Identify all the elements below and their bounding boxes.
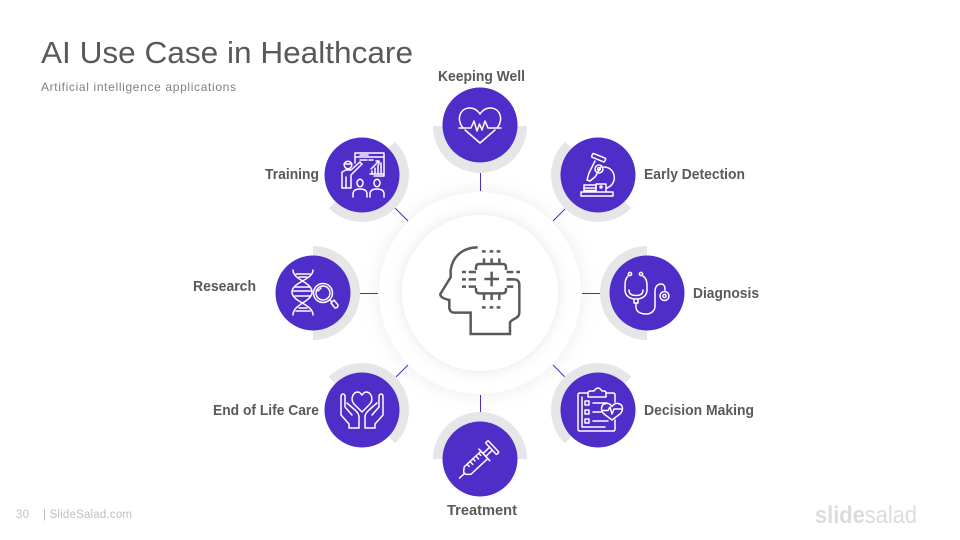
gray half ring [313,246,360,340]
footer: page number: 30 [16,509,29,521]
gray half ring [532,142,631,241]
label: End of Life Care [213,402,319,419]
label: Decision Making [644,402,754,419]
label: Early Detection [644,166,745,183]
connector lines [360,173,600,413]
gray half ring [329,344,428,443]
label: Diagnosis [693,285,759,302]
icon: presenter with chart [342,153,384,197]
purple circle [324,372,400,448]
icon: stethoscope [625,272,669,314]
gray half ring [329,142,428,241]
logo wordmark: slidesalad [815,502,917,529]
node: Decision Making [532,344,754,448]
node: End of Life Care [213,344,428,448]
purple circle [324,138,400,212]
gray half ring [433,412,527,459]
subtitle: Artificial intelligence applications [41,80,236,94]
outer ring [379,192,581,394]
node: Training [265,138,428,241]
icon: heart with pulse [459,108,501,143]
icon: hands holding heart [341,392,383,428]
node: Keeping Well [433,68,527,173]
label: Training [265,166,319,183]
label: Keeping Well [438,68,525,85]
purple circle [276,256,350,330]
node: Diagnosis [600,246,759,340]
purple circle [560,372,636,448]
gray half ring [600,246,647,340]
inner disc [402,215,558,371]
purple circle [560,138,636,212]
icon: clipboard with heart [578,388,622,431]
icon: syringe [454,441,499,484]
icon: head with chip [440,247,520,334]
purple circle [442,422,518,496]
node: Treatment [433,412,527,519]
label: Research [193,278,256,295]
node: Early Detection [532,138,745,241]
label: Treatment [447,502,517,519]
gray half ring [532,344,631,443]
node: Research [193,246,360,340]
purple circle [442,88,518,162]
purple circle [610,256,684,330]
title: AI Use Case in Healthcare [41,35,413,70]
central hub [379,192,581,394]
icon: microscope [581,153,614,196]
gray half ring [433,126,527,173]
icon: DNA and magnifier [292,270,338,315]
footer: site name: | SlideSalad.com [43,509,132,521]
